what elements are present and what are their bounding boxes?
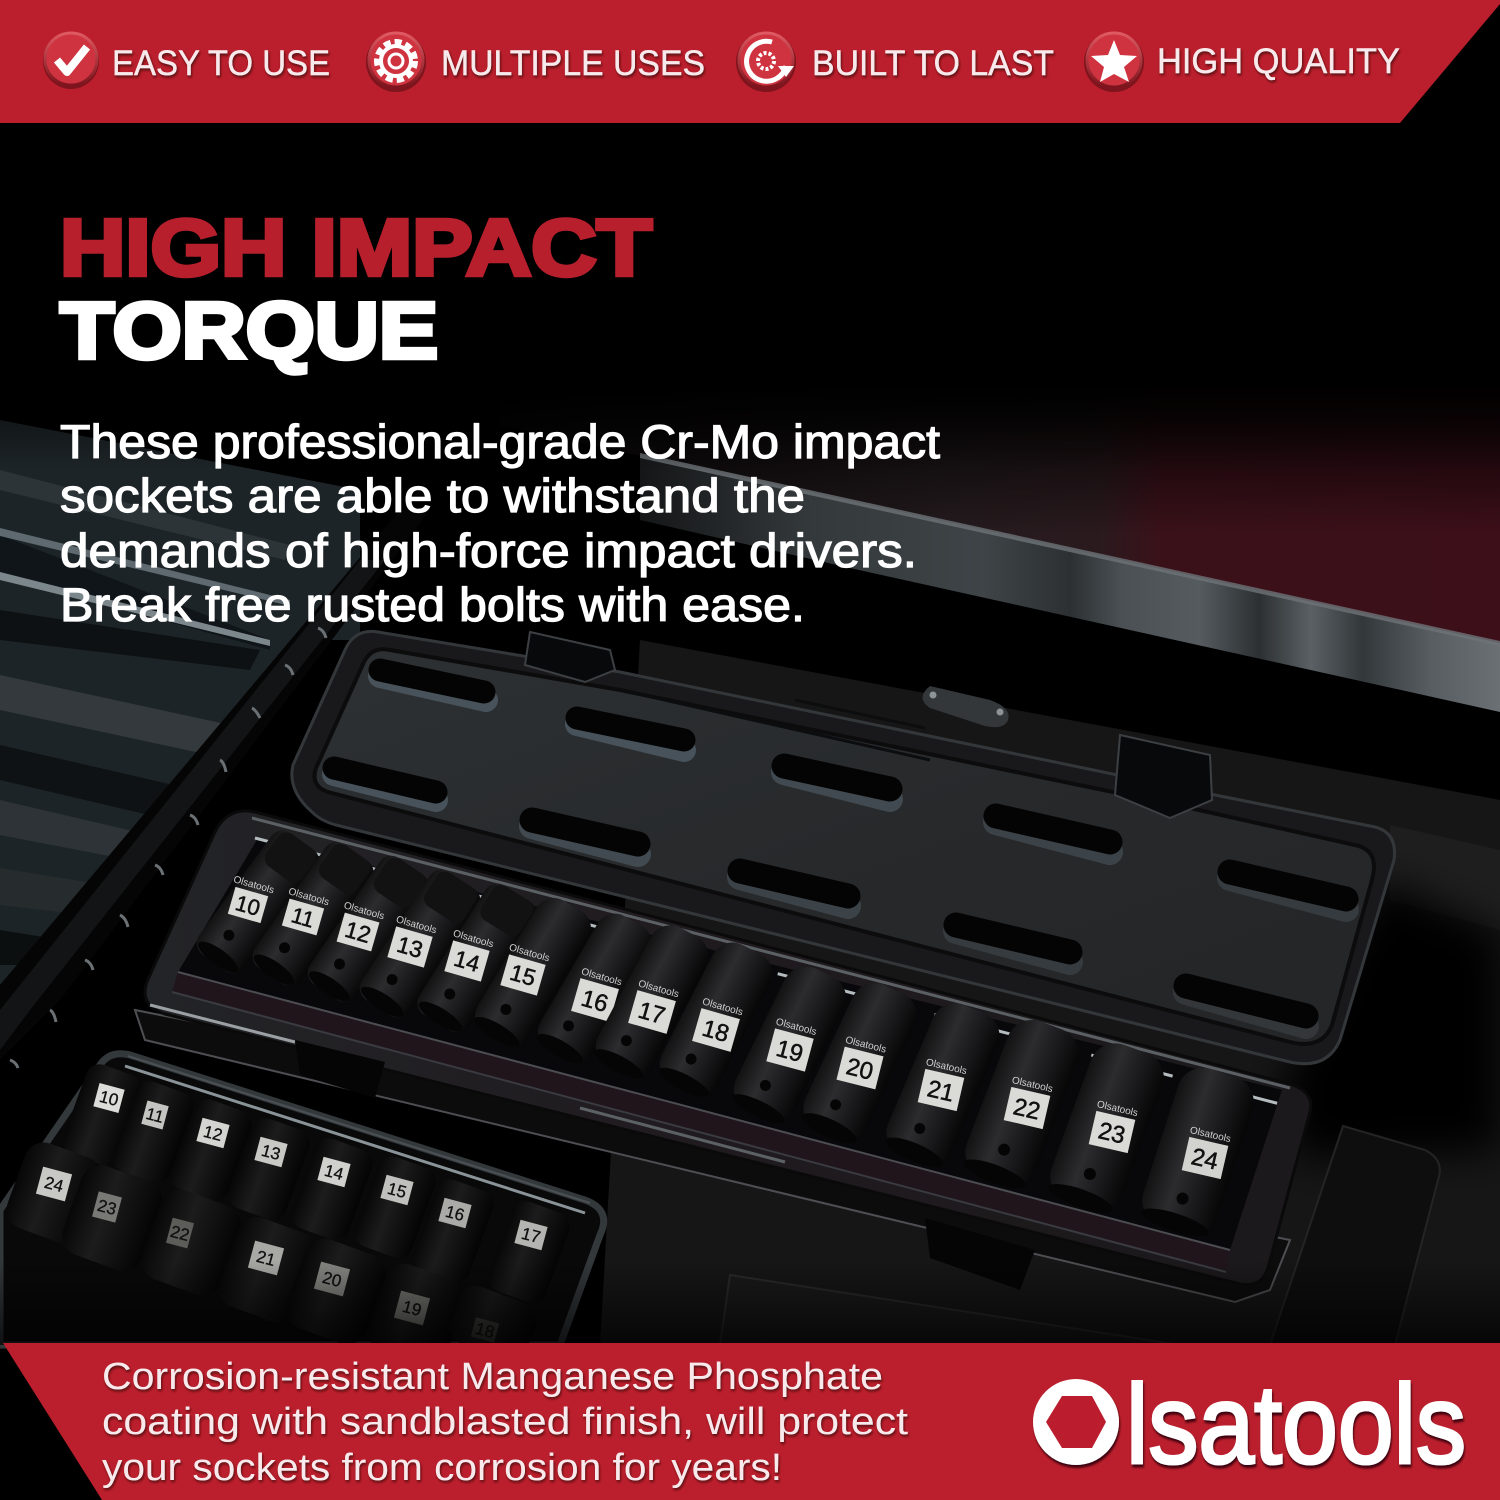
socket 21: 21 — [925, 1075, 957, 1108]
socket 18: 18 — [699, 1015, 732, 1048]
socket 16: Olsatools — [580, 966, 623, 988]
metal drawer edge strip — [640, 453, 1500, 712]
left front highlight — [150, 1005, 295, 1042]
socket 17: Olsatools — [637, 978, 680, 1000]
hinge plate — [922, 686, 1009, 727]
socket 24: Olsatools — [1189, 1125, 1232, 1145]
benefit: built to last: BUILT TO LAST — [812, 44, 1054, 83]
center slot — [580, 1108, 785, 1162]
bottom description text: your sockets from corrosion for years! — [102, 1447, 782, 1489]
case base tray — [145, 811, 1311, 1290]
benefit: high quality: HIGH QUALITY — [1157, 42, 1400, 81]
benefit: easy to use — [43, 33, 330, 89]
socket 11 — [246, 837, 379, 992]
bottom description text: Corrosion-resistant Manganese Phosphate — [102, 1356, 883, 1398]
socket 15: 15 — [507, 959, 539, 991]
short socket labels: 13 — [259, 1141, 282, 1164]
socket 15: Olsatools — [508, 942, 551, 964]
benefit: high quality — [1084, 32, 1400, 92]
short socket labels: 21 — [254, 1247, 277, 1270]
body paragraph: These professional-grade Cr-Mo impact — [60, 415, 940, 468]
drawer floor — [600, 640, 1500, 1345]
socket 18 — [652, 935, 780, 1104]
socket 24 — [1135, 1061, 1260, 1243]
headline: HIGH IMPACT — [60, 203, 652, 292]
socket 17 — [588, 918, 716, 1085]
socket 10 — [191, 825, 325, 980]
socket 16 — [530, 906, 659, 1071]
Olsatools logo: O — [1033, 1362, 1119, 1487]
icon: cycle gear — [736, 32, 796, 92]
socket 22: 22 — [1011, 1093, 1043, 1126]
bottom photo vignette — [0, 1260, 1500, 1345]
benefit: multiple uses — [366, 32, 705, 92]
top photo fade to black — [0, 120, 1500, 470]
socket 22 — [957, 1012, 1086, 1196]
socket 24: 24 — [1189, 1143, 1221, 1176]
socket 23: Olsatools — [1096, 1099, 1139, 1119]
base latches — [295, 1040, 1035, 1290]
socket 12: Olsatools — [342, 900, 385, 922]
socket 21 — [878, 996, 1007, 1174]
socket 14: 14 — [451, 945, 483, 977]
socket 14: Olsatools — [452, 928, 495, 950]
short socket labels: 20 — [320, 1268, 343, 1291]
socket 14 — [412, 878, 542, 1039]
socket 10: Olsatools — [232, 874, 275, 896]
bottom red banner — [3, 1343, 1500, 1500]
lid ribs — [620, 690, 930, 760]
socket 19: Olsatools — [775, 1017, 818, 1038]
short socket labels: 14 — [322, 1161, 345, 1184]
body paragraph: Break free rusted bolts with ease. — [60, 578, 805, 631]
body paragraph: demands of high-force impact drivers. — [60, 524, 917, 577]
socket 16: 16 — [578, 985, 611, 1018]
short socket labels: 22 — [168, 1222, 191, 1245]
socket 20: Olsatools — [844, 1035, 887, 1056]
case lid — [292, 631, 1394, 1064]
socket 19: 19 — [773, 1035, 806, 1068]
socket 21: Olsatools — [925, 1057, 968, 1077]
socket 13: 13 — [394, 931, 426, 963]
lower left steel edge — [0, 1228, 290, 1345]
small socket case — [0, 1054, 604, 1371]
socket 12: 12 — [342, 916, 374, 948]
short socket labels: 19 — [400, 1297, 423, 1320]
socket 15 — [467, 891, 598, 1054]
socket 11: 11 — [288, 902, 317, 933]
wall panel with red glow — [500, 380, 1500, 645]
divider rail with clips — [0, 510, 430, 1068]
short socket labels: 16 — [443, 1202, 466, 1225]
socket 13 — [354, 864, 486, 1024]
headline: TORQUE — [60, 286, 438, 375]
short socket labels: 23 — [95, 1196, 118, 1219]
bottom description text: coating with sandblasted finish, will protect — [102, 1401, 908, 1443]
socket 13: Olsatools — [395, 914, 438, 936]
socket 22: Olsatools — [1011, 1075, 1054, 1095]
short sockets row 10-17 — [59, 1060, 574, 1307]
socket 23: 23 — [1096, 1117, 1128, 1150]
top red banner — [0, 0, 1500, 123]
short socket labels: 17 — [519, 1224, 542, 1247]
socket 20: 20 — [843, 1053, 876, 1086]
icon: check mark — [43, 33, 99, 89]
socket 19 — [725, 959, 854, 1130]
icon: gear — [366, 32, 426, 92]
hinge clips — [525, 632, 1212, 818]
short socket labels: 11 — [144, 1104, 166, 1127]
body paragraph — [60, 415, 940, 631]
socket 11: Olsatools — [287, 886, 330, 908]
short socket labels: 18 — [473, 1319, 496, 1342]
short socket labels: 12 — [201, 1122, 224, 1145]
case base front wall — [135, 1010, 1290, 1302]
socket 12 — [302, 850, 434, 1008]
benefit: built to last — [736, 32, 1054, 92]
icon: star — [1084, 32, 1144, 92]
socket 20 — [795, 975, 925, 1151]
short sockets row 24-18 — [1, 1137, 542, 1371]
socket 10: 10 — [233, 890, 263, 921]
socket 18: Olsatools — [701, 996, 744, 1018]
headline — [60, 203, 652, 375]
Olsatools logo: lsatools — [1126, 1362, 1466, 1487]
short socket labels: 10 — [97, 1087, 120, 1110]
bottom description text — [102, 1356, 908, 1489]
short socket labels: 15 — [385, 1179, 408, 1202]
socket 17: 17 — [635, 997, 668, 1030]
benefit: multiple uses: MULTIPLE USES — [441, 44, 705, 83]
short socket labels: 24 — [42, 1173, 65, 1196]
socket 23 — [1042, 1036, 1171, 1220]
left steel stripes — [0, 420, 360, 985]
short socket labels — [36, 1083, 548, 1343]
benefit: easy to use: EASY TO USE — [112, 44, 330, 83]
lid slots — [334, 670, 1346, 1026]
deep sockets row 10-24 — [191, 825, 1260, 1243]
body paragraph: sockets are able to withstand the — [60, 469, 805, 522]
second case faint bottom right — [720, 1126, 1440, 1345]
